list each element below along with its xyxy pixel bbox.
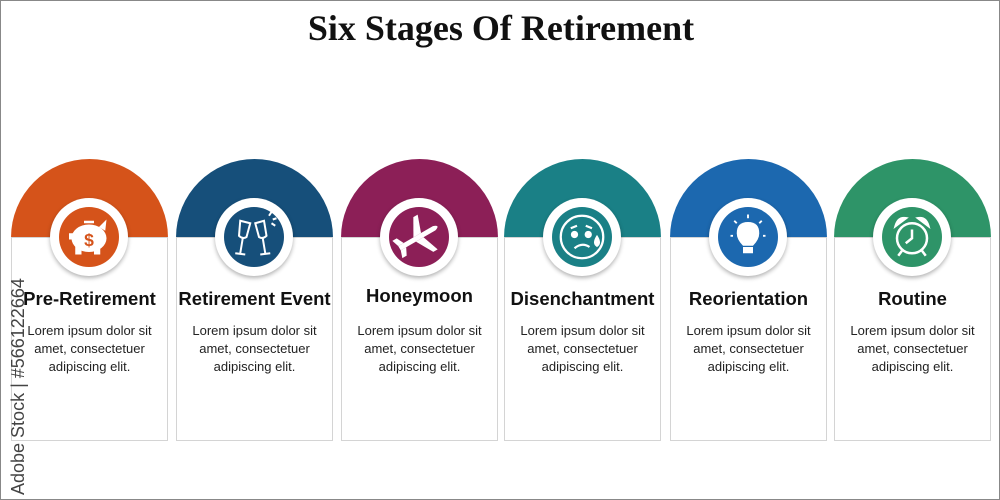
text: amet, consectetuer (364, 341, 475, 356)
heading: Reorientation (689, 288, 808, 309)
panel: routine (834, 159, 991, 441)
text: Lorem ipsum dolor sit (686, 323, 811, 338)
heading: Honeymoon (366, 285, 473, 306)
text: Lorem ipsum dolor sit (357, 323, 482, 338)
text (520, 323, 645, 374)
text: adipiscing elit. (708, 359, 789, 374)
panel: reorientation (670, 159, 827, 441)
text: adipiscing elit. (49, 359, 130, 374)
text: amet, consectetuer (693, 341, 804, 356)
panel: retirement event (176, 159, 333, 441)
text (686, 323, 811, 374)
text: amet, consectetuer (857, 341, 968, 356)
icon: piggy bank: $ (84, 230, 94, 250)
panel: pre-retirement (11, 159, 168, 441)
text: amet, consectetuer (199, 341, 310, 356)
text: adipiscing elit. (214, 359, 295, 374)
text: adipiscing elit. (872, 359, 953, 374)
heading: Pre-Retirement (23, 288, 156, 309)
text: Lorem ipsum dolor sit (192, 323, 317, 338)
icon: piggy bank (50, 198, 128, 276)
text (27, 323, 152, 374)
text: Lorem ipsum dolor sit (850, 323, 975, 338)
text: adipiscing elit. (542, 359, 623, 374)
text: amet, consectetuer (527, 341, 638, 356)
panel: honeymoon (341, 159, 498, 441)
heading: Retirement Event (178, 288, 331, 309)
text: amet, consectetuer (34, 341, 145, 356)
icon: champagne glasses (215, 198, 293, 276)
text (850, 323, 975, 374)
watermark text: Adobe Stock | #566122664 (8, 278, 28, 495)
text: Lorem ipsum dolor sit (27, 323, 152, 338)
title: Six Stages Of Retirement (308, 8, 694, 48)
icon: sad face (543, 198, 621, 276)
panel: disenchantment (504, 159, 661, 441)
text: Lorem ipsum dolor sit (520, 323, 645, 338)
icon: light bulb (709, 198, 787, 276)
heading: Disenchantment (511, 288, 654, 309)
text (357, 323, 482, 374)
text (192, 323, 317, 374)
heading: Routine (878, 288, 947, 309)
icon: airplane (380, 198, 458, 276)
icon: alarm clock (873, 198, 951, 276)
text: adipiscing elit. (379, 359, 460, 374)
